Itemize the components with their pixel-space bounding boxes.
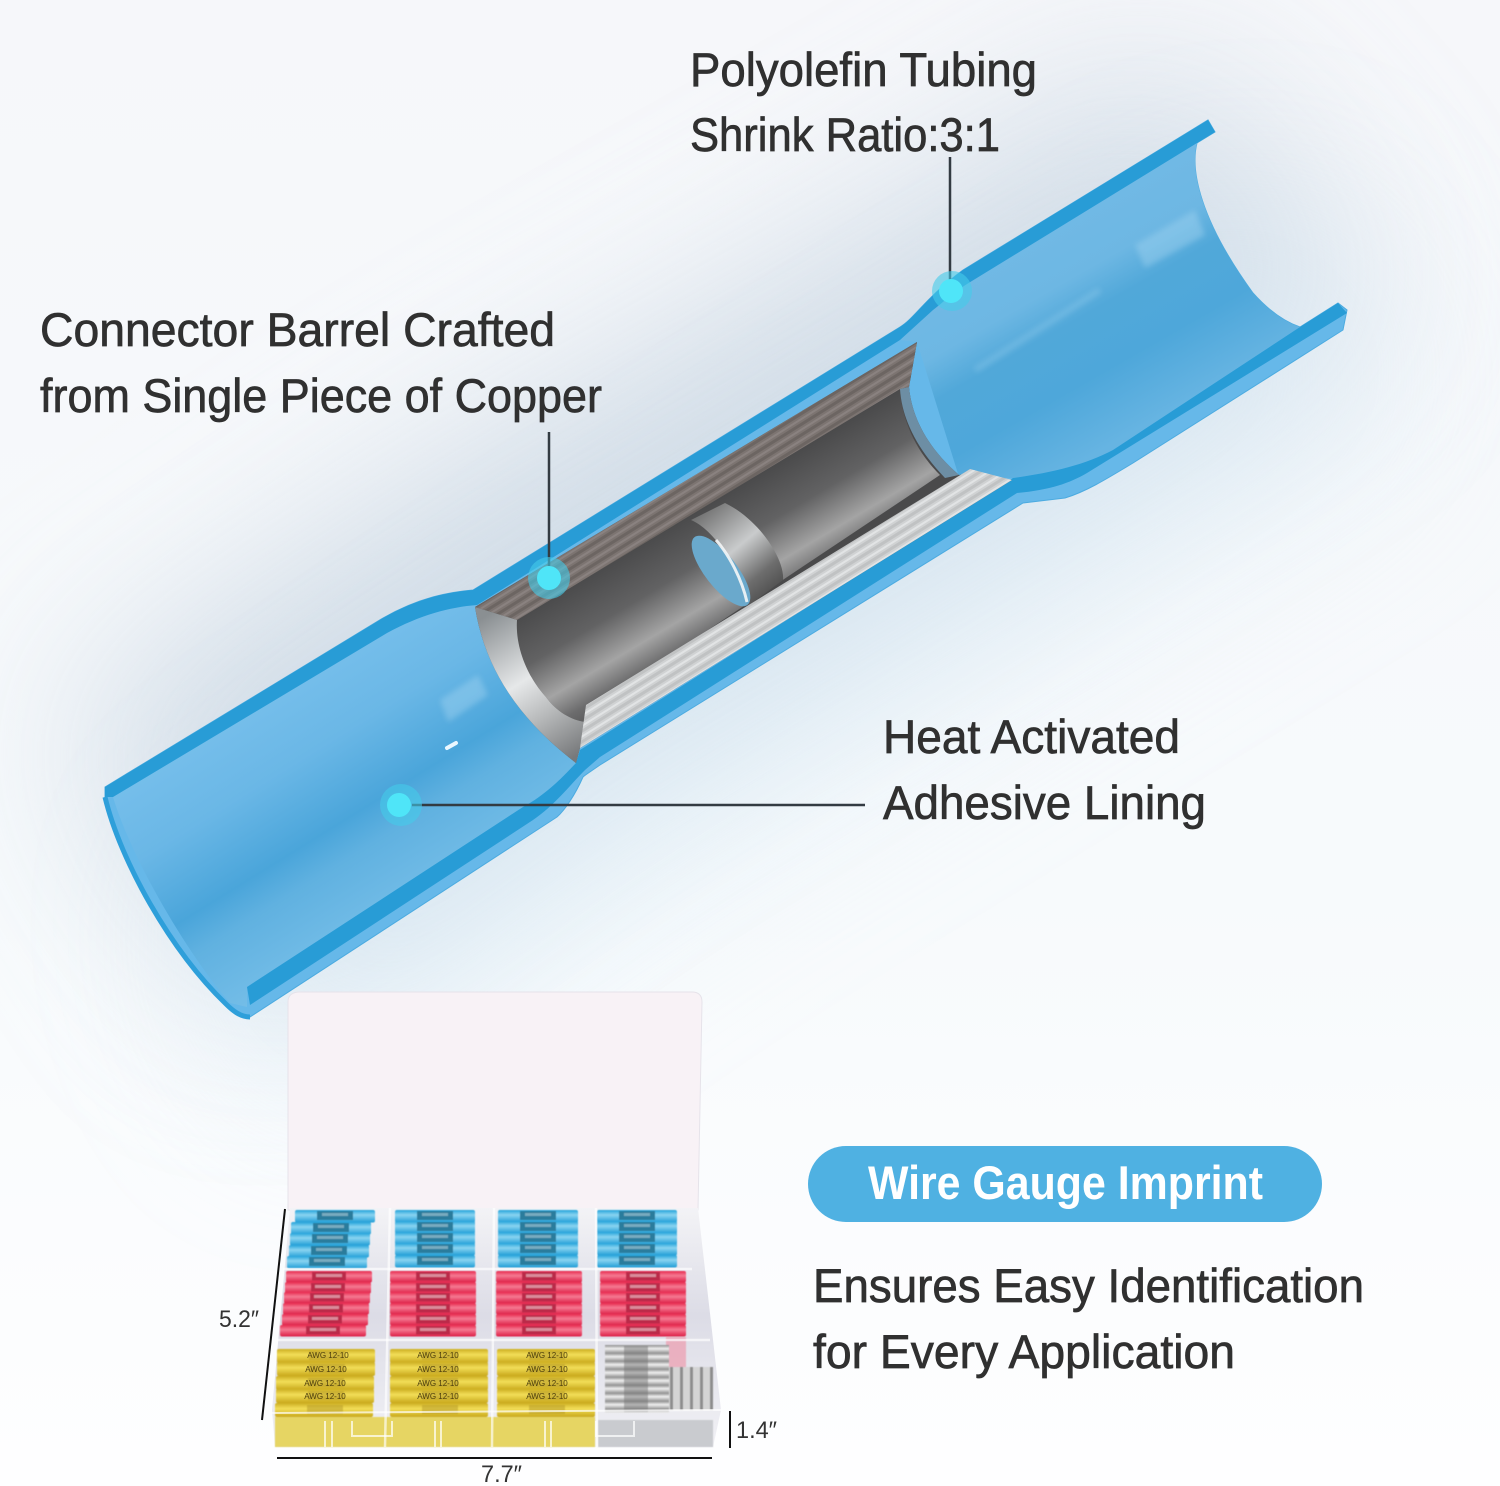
dimension: height 5.2 (219, 1209, 285, 1420)
wire gauge imprints: AWG 12-10 (304, 1379, 346, 1388)
heading text (690, 43, 1037, 161)
red connectors row (280, 1271, 686, 1372)
leader line (412, 804, 865, 806)
barrel upper wall (475, 342, 917, 620)
wire gauge imprints: AWG 12-10 (417, 1379, 459, 1388)
wire gauge imprints: AWG 12-10 (526, 1392, 568, 1401)
connector tube illustration (105, 120, 1347, 1017)
heading text: Polyolefin Tubing (690, 43, 1037, 96)
wire gauge imprints: AWG 12-10 (417, 1392, 459, 1401)
box base (272, 1208, 721, 1447)
dimension: depth 1.4 (730, 1411, 777, 1448)
dimension: height 5.2: 5.2″ (219, 1306, 259, 1333)
silver lower wall (580, 469, 1012, 748)
wire gauge imprint pill: Wire Gauge Imprint (868, 1156, 1263, 1209)
front wall and notches (272, 1410, 721, 1447)
highlight glint (447, 743, 456, 748)
wire gauge description: Ensures Easy Identification (813, 1259, 1364, 1312)
dimension: depth 1.4: 1.4″ (736, 1417, 777, 1444)
wire gauge imprints: AWG 12-10 (526, 1365, 568, 1374)
right interior of tube (900, 143, 1300, 478)
blue connectors row (287, 1210, 677, 1268)
silver end ring (475, 607, 585, 763)
heading text (883, 710, 1206, 829)
silver barrels (598, 1345, 713, 1447)
wire gauge imprints: AWG 12-10 (526, 1351, 568, 1360)
barrel inner cylinder (517, 389, 940, 722)
lower rim band (247, 303, 1347, 1005)
wire gauge imprints: AWG 12-10 (305, 1365, 347, 1374)
callout: polyolefin tubing (690, 43, 1037, 311)
heading text: Connector Barrel Crafted (40, 303, 555, 356)
left end edge (105, 797, 250, 1017)
leader line (548, 432, 550, 575)
callout: connector barrel (40, 303, 602, 599)
tube outer silhouette (105, 120, 1347, 1017)
box lid (288, 992, 702, 1210)
top rim band (105, 120, 1215, 797)
tube highlights (440, 210, 1205, 722)
wire gauge imprints: AWG 12-10 (417, 1351, 459, 1360)
wire gauge imprint pill (808, 1146, 1322, 1222)
metal barrel base (475, 342, 1012, 763)
heading text: Heat Activated (883, 710, 1180, 763)
callout: adhesive lining (380, 710, 1206, 829)
yellow connectors row (275, 1349, 595, 1447)
heading text (40, 303, 602, 422)
wire gauge description (813, 1259, 1364, 1378)
marker dot (380, 784, 422, 826)
heading text: from Single Piece of Copper (40, 369, 602, 422)
product box with connectors (272, 992, 721, 1447)
central stop ring (691, 503, 783, 606)
wire gauge imprints: AWG 12-10 (526, 1379, 568, 1388)
left interior of tube (113, 605, 580, 1007)
ring highlight (716, 540, 747, 602)
marker dot (528, 557, 570, 599)
heading text: Adhesive Lining (883, 776, 1206, 829)
wire gauge imprints: AWG 12-10 (304, 1392, 346, 1401)
marker dot (932, 271, 972, 311)
heading text: Shrink Ratio:3:1 (690, 108, 1000, 161)
wire gauge imprints: AWG 12-10 (417, 1365, 459, 1374)
wire gauge imprints (304, 1351, 568, 1401)
wire gauge imprints: AWG 12-10 (307, 1351, 349, 1360)
compartment dividers (277, 1208, 710, 1447)
leader line (949, 157, 951, 290)
barrel far edge (900, 387, 959, 478)
blue ring opening (682, 527, 760, 615)
wire gauge description: for Every Application (813, 1325, 1235, 1378)
